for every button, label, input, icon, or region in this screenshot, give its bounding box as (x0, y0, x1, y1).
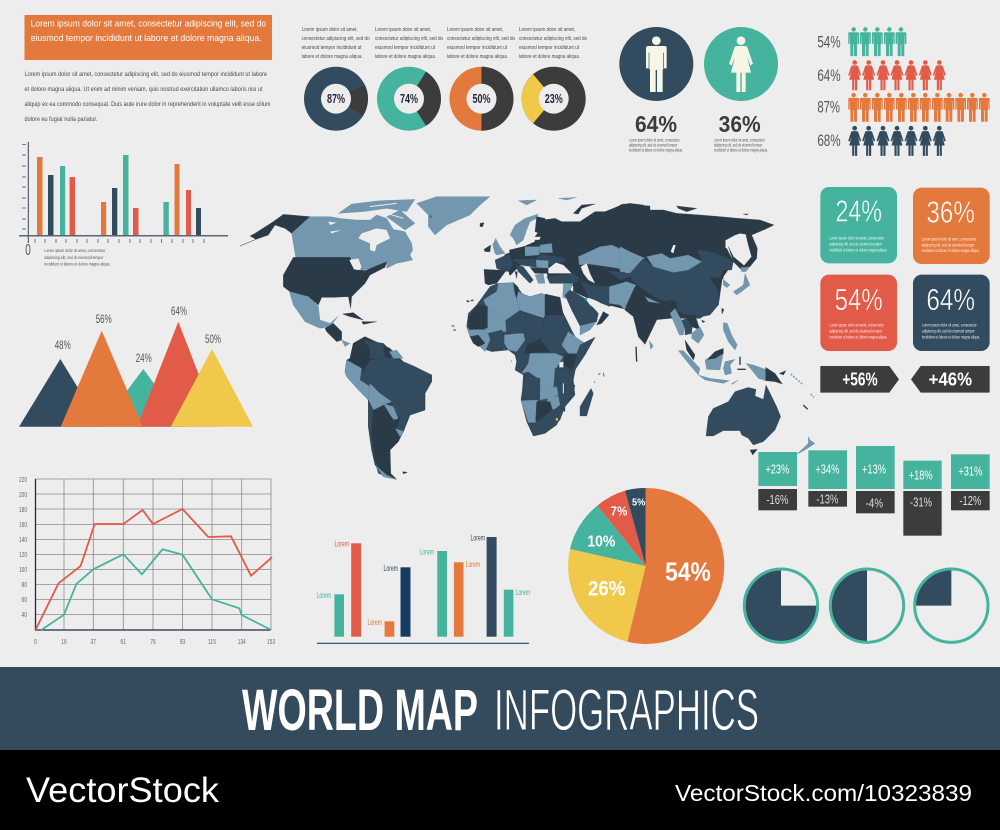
bar chart caption: Lorem ipsum dolor sit amet, consectetur (44, 248, 106, 253)
Alaska (240, 214, 310, 246)
circle: three quarters (744, 569, 818, 642)
icon: woman in teal circle (704, 27, 778, 101)
bars (334, 537, 513, 637)
stat: women 36% (714, 111, 768, 153)
Mexico (289, 292, 338, 328)
row: 54% teal men: 54% (817, 32, 841, 51)
row: 87% orange men: 87% (817, 98, 840, 117)
arrow tag: +56%: +56% (842, 369, 878, 390)
up and down delta boxes (758, 446, 990, 536)
donut chart 87%: 87% (327, 92, 345, 106)
body text block: aliquip ex ea commodo consequat. Duis aute irure dolor in reprehenderit in voluptate velit esse cillum (24, 102, 270, 108)
stat: men 64% (629, 111, 683, 153)
triangle chart: 48% (55, 338, 71, 352)
Northern Europe (484, 214, 548, 255)
donut chart 74% (377, 67, 441, 131)
Russia west (535, 204, 650, 268)
line chart x labels: 153 (267, 637, 275, 646)
map marker: teal dot (429, 215, 432, 218)
bar chart: grouped (19, 142, 228, 266)
card: 64% navy (913, 275, 990, 351)
bar labels: Lorem (466, 559, 480, 569)
world map (240, 197, 815, 479)
line chart grid (36, 479, 271, 630)
Sri Lanka (649, 341, 653, 349)
line chart y labels: 60 (22, 595, 27, 604)
Southern Africa (521, 375, 593, 436)
delta column 2: +34% (815, 463, 839, 477)
row: 54% teal men (817, 27, 906, 56)
labelled bar chart (316, 533, 530, 643)
card: 54% red: Lorem ipsum dolor sit amet, consectetur (829, 323, 884, 328)
donut captions: eiusmod tempor incididunt ut (519, 45, 580, 51)
Canada and Greenland (292, 197, 490, 271)
line chart axes (36, 479, 271, 630)
map: Europe and Middle East (480, 197, 650, 310)
donut chart 74%: 74% (400, 92, 418, 106)
title banner: WORLD MAP (242, 678, 478, 743)
title banner (0, 667, 1000, 750)
line chart x labels: 61 (121, 637, 126, 646)
title banner: INFOGRAPHICS (494, 678, 759, 743)
Arctic islands (518, 200, 537, 205)
delta column 1: -16% (766, 493, 788, 507)
card: 54% red: adipiscing elit, sed do eiusmod tempor (829, 329, 882, 334)
Central Africa (506, 313, 570, 390)
line chart x labels: 93 (180, 637, 185, 646)
arrow tag: +56% (820, 366, 899, 393)
Philippines (723, 323, 737, 350)
delta column 5: -12% (959, 494, 981, 508)
Kazakhstan east (620, 247, 645, 273)
card: 36% orange (913, 188, 990, 264)
line chart x labels: 37 (91, 637, 96, 646)
delta column 1: +23% (765, 463, 789, 477)
line chart (19, 475, 275, 646)
donut captions: consectetur adipiscing elit, sed do (375, 36, 443, 42)
donut chart 50% (450, 67, 514, 131)
Japan (733, 267, 750, 295)
bar labels: Lorem (420, 547, 434, 557)
triangle chart: 56% (96, 312, 112, 326)
triangle chart: 24% (136, 351, 152, 365)
line chart x labels: 134 (238, 637, 246, 646)
delta column 5 (951, 454, 990, 510)
line chart y labels: 80 (22, 580, 27, 589)
stat: women 36%: incididunt ut labore et dolore magna aliqua. (714, 148, 768, 153)
donut chart 23% (522, 67, 586, 131)
callout: orange header box (24, 15, 272, 60)
New Zealand (797, 437, 815, 454)
bar labels: Lorem (516, 587, 530, 597)
delta column 2: -13% (816, 492, 838, 506)
donut captions: Lorem ipsum dolor sit amet, (519, 27, 575, 33)
Black Sea (548, 263, 572, 273)
line chart y labels: 200 (19, 490, 27, 499)
card: 54% red: incididunt ut labore et dolore magna aliqua. (829, 335, 887, 340)
body text block: dolore eu fugiat nulla pariatur. (24, 117, 98, 123)
map: Americas (240, 197, 490, 479)
card: 64% navy: 64% (926, 283, 975, 317)
pie chart: 10% (587, 534, 615, 551)
donut chart 87% (304, 67, 368, 131)
row: 87% orange men (817, 93, 990, 122)
gender stats panel (619, 27, 778, 153)
line chart y labels: 100 (19, 565, 27, 574)
small islands (467, 300, 604, 383)
delta column 3 (856, 446, 895, 513)
arrow tag: +46% (911, 366, 990, 393)
line chart y labels: 120 (19, 550, 27, 559)
card: 24% teal: adipiscing elit, sed do eiusmod tempor (829, 242, 882, 247)
row: 68% navy women: 68% (817, 131, 841, 150)
line chart y labels: 220 (19, 475, 27, 484)
Mongolia (647, 253, 702, 272)
body text block (24, 72, 270, 123)
New Guinea (746, 363, 786, 384)
circle: half (830, 569, 904, 642)
card: 54% red (820, 275, 897, 351)
delta column 4 (903, 461, 942, 536)
circle: one quarter (915, 569, 988, 642)
watermark bar (0, 750, 1000, 830)
North Africa (477, 283, 563, 321)
row: 68% navy women (817, 126, 946, 156)
Western and Central Europe (484, 243, 567, 285)
small islands (636, 347, 814, 409)
triangle chart: 50% (205, 332, 221, 346)
progress circles (744, 569, 988, 642)
bar chart axes (19, 142, 228, 243)
Taiwan (722, 308, 724, 314)
baseline (317, 642, 529, 644)
South America (345, 337, 432, 479)
East Africa (555, 332, 595, 387)
icon: man in navy circle (619, 27, 693, 101)
map: Eurasia land base (505, 215, 733, 320)
pictogram rows (817, 27, 990, 156)
watermark bar: VectorStock.com/10323839 (675, 780, 972, 806)
card: 36% orange: adipiscing elit, sed do eiusmod tempor (922, 242, 975, 247)
row: 64% red women: 64% (817, 66, 841, 85)
stat: men 64%: Lorem ipsum dolor sit amet, consectetur (629, 137, 680, 142)
pie chart (568, 488, 724, 644)
donut captions: consectetur adipiscing elit, sed do (447, 36, 515, 42)
delta column 3: -4% (866, 496, 883, 510)
stat cards panel (820, 187, 990, 393)
Russia east (620, 203, 774, 270)
donut captions: Lorem ipsum dolor sit amet, (302, 27, 358, 33)
delta column 4: -31% (910, 496, 932, 510)
donut captions: labore et dolore magna aliqua. (447, 54, 508, 60)
bar labels: Lorem (470, 533, 485, 543)
India (625, 287, 677, 344)
line chart y labels (19, 475, 27, 619)
Korea (713, 275, 730, 288)
donut captions: eiusmod tempor incididunt ut (375, 45, 436, 51)
pie chart: 5% (632, 497, 645, 508)
bar chart bars (37, 155, 201, 235)
Arabia (565, 290, 609, 335)
Middle East (547, 273, 636, 310)
pie chart: 54% (665, 557, 711, 587)
delta column 1 (758, 452, 797, 510)
delta column 5: +31% (958, 465, 982, 479)
stat: men 64%: 64% (635, 111, 677, 137)
Tasmania (750, 449, 757, 455)
line chart x labels (34, 637, 275, 646)
stat: women 36%: Lorem ipsum dolor sit amet, consectetur (714, 137, 765, 142)
delta column 3: +13% (862, 462, 886, 476)
donut captions: eiusmod tempor incididunt ut (302, 45, 362, 51)
line chart x labels: 76 (150, 637, 156, 646)
delta column 4: +18% (909, 468, 933, 482)
triangle chart: 64% (171, 304, 187, 318)
donut captions: labore et dolore magna aliqua. (519, 54, 580, 60)
bar chart caption: adipiscing elit, sed do eiusmod tempor (44, 255, 104, 260)
small Atlantic islands (452, 301, 473, 330)
bar labels: Lorem (334, 539, 349, 549)
Iceland (480, 223, 484, 227)
line chart x labels: 0 (34, 637, 37, 646)
donut chart 23%: 23% (545, 92, 563, 106)
line chart x labels: 115 (208, 637, 216, 646)
bar labels: Lorem (316, 590, 331, 600)
callout: orange header box: Lorem ipsum dolor sit amet, consectetur adipiscing elit, sed do (31, 18, 266, 30)
line chart y labels: 40 (22, 610, 27, 619)
delta column 2 (808, 450, 847, 507)
Caspian Sea (581, 263, 595, 283)
card: 54% red: 54% (835, 283, 883, 317)
body text block: Lorem ipsum dolor sit amet, consectetur adipiscing elit, sed do eiusmod tempor incididunt ut labore (24, 72, 268, 78)
row: 64% red women (817, 60, 946, 90)
arrow tag: +46%: +46% (929, 369, 972, 390)
card: 36% orange: 36% (926, 195, 975, 229)
line chart y labels: 160 (19, 520, 27, 529)
donut captions (302, 27, 587, 60)
donut captions: eiusmod tempor incididunt ut (447, 45, 508, 51)
watermark bar: VectorStock (26, 771, 220, 810)
stat: women 36%: adipiscing elit, sed do eiusmod tempor (714, 142, 763, 147)
stat: men 64%: incididunt ut labore et dolore magna aliqua. (629, 148, 683, 153)
Australia (706, 385, 781, 445)
pie chart: 26% (588, 577, 625, 601)
stat: women 36%: 36% (719, 111, 761, 137)
China (630, 249, 733, 318)
line chart y labels: 140 (19, 535, 27, 544)
map: East Asia (620, 203, 774, 344)
body text block: et dolore magna aliqua. Ut enim ad minim veniam, quis nostrud exercitation ullamco laboris nisi ut (24, 87, 263, 93)
donut captions: Lorem ipsum dolor sit amet, (375, 27, 431, 33)
card: 64% navy: adipiscing elit, sed do eiusmod tempor (922, 329, 975, 334)
bar labels: Lorem (384, 563, 398, 573)
Indonesia (678, 348, 738, 384)
donut chart 50%: 50% (472, 92, 490, 106)
donut captions: labore et dolore magna aliqua. (302, 54, 363, 60)
map marker: blue dot (585, 298, 587, 300)
line chart y labels: 180 (19, 505, 27, 514)
line chart x labels: 16 (61, 637, 67, 646)
card: 24% teal: 24% (835, 195, 882, 229)
donut captions: Lorem ipsum dolor sit amet, (447, 27, 503, 33)
donut captions: consectetur adipiscing elit, sed do (519, 36, 587, 42)
bar chart caption: incididunt ut labore et dolore magna aliqua. (44, 262, 110, 266)
callout: orange header box: eiusmod tempor incididunt ut labore et dolore magna aliqua. (31, 33, 262, 44)
card: 24% teal (820, 187, 897, 263)
bar chart origin label: 0 (25, 242, 31, 259)
triangle chart (19, 304, 253, 427)
USA (283, 257, 387, 308)
series: teal line (41, 549, 271, 630)
Africa silhouette (467, 283, 595, 436)
pie chart: 7% (611, 504, 627, 518)
Central America and Caribbean (325, 313, 377, 347)
map: Southeast Asia and Oceania (636, 308, 815, 455)
Central Asia (578, 245, 645, 285)
bar labels (316, 533, 530, 627)
map: Africa and Arabia (467, 283, 609, 436)
West Africa (467, 305, 525, 352)
map marker: orange dot (556, 418, 558, 421)
donut captions: labore et dolore magna aliqua. (375, 54, 436, 60)
card: 24% teal: Lorem ipsum dolor sit amet, consectetur (829, 236, 884, 241)
bar chart caption (44, 248, 110, 266)
Nepal (645, 297, 660, 303)
series: red line (36, 509, 272, 630)
card: 24% teal: incididunt ut labore et dolore magna aliqua. (829, 247, 887, 252)
stat: men 64%: adipiscing elit, sed do eiusmod tempor (629, 142, 678, 147)
donut captions: consectetur adipiscing elit, sed do (302, 36, 370, 42)
mainland Southeast Asia (670, 308, 705, 360)
bar labels: Lorem (368, 617, 382, 627)
